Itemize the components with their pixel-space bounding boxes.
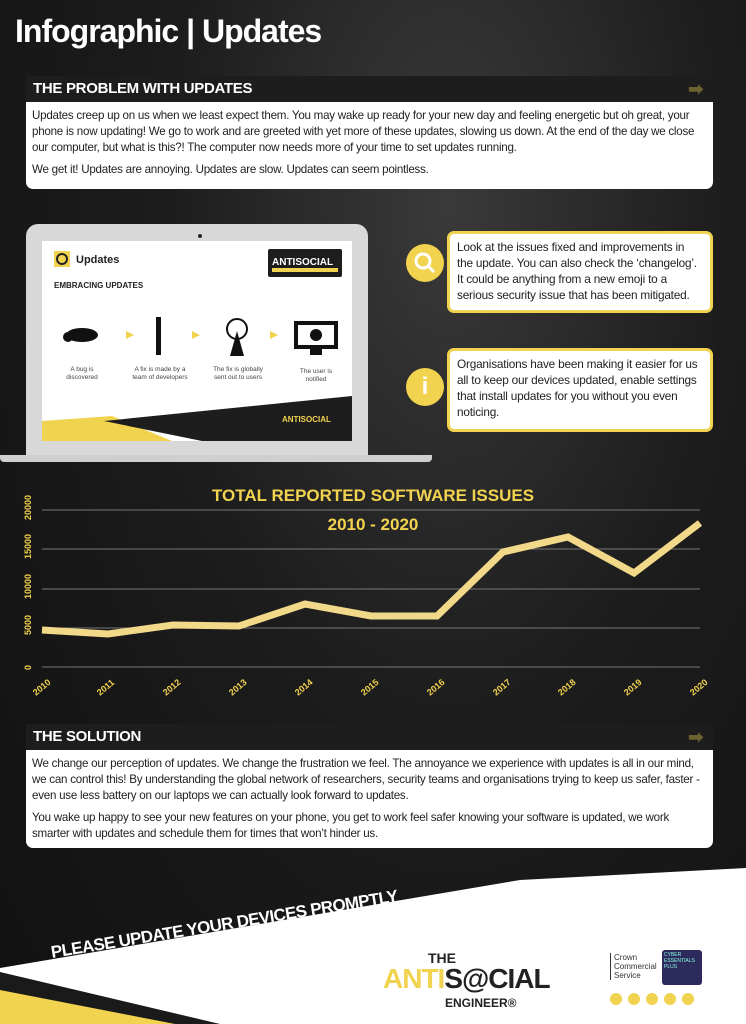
accreditation logos: Commercial — [614, 962, 657, 971]
line chart: 10000 — [23, 574, 33, 599]
heading: solution: ➡ — [688, 727, 703, 747]
line chart: 15000 — [23, 534, 33, 559]
laptop illustration: team of developers — [132, 374, 188, 381]
line chart: 5000 — [23, 615, 33, 635]
text block: problem — [26, 102, 713, 189]
accreditation logos: CYBER ESSENTIALS PLUS — [664, 952, 695, 970]
line chart: 2016 — [425, 677, 447, 698]
callout: changelog: Look at the issues fixed and improvements in the update. You can also check the ‘changelog’. It could be anything from a new emoji to a serious security issue that has been mitigated. — [457, 240, 697, 302]
heading: problem — [26, 76, 713, 102]
slogan: PLEASE UPDATE YOUR DEVICES PROMPTLY — [50, 886, 400, 962]
laptop illustration: A bug is — [70, 366, 94, 373]
callout: automatic updates: Organisations have been making it easier for us all to keep our devices updated, enable settings that install updates for you without you even noticing. — [457, 357, 697, 419]
line chart: 2011 — [95, 677, 116, 698]
chart title: TOTAL REPORTED SOFTWARE ISSUES — [212, 486, 534, 505]
panel: solution — [26, 725, 713, 848]
laptop illustration: discovered — [66, 374, 98, 381]
icon: info: i — [422, 373, 428, 400]
laptop illustration: ANTISOCIAL — [272, 257, 333, 268]
laptop illustration: sent out to users — [214, 374, 263, 381]
accreditation logos — [610, 950, 702, 1005]
line chart — [23, 486, 710, 698]
logo: antisocial engineer: ENGINEER® — [445, 996, 517, 1010]
icon: magnifier — [406, 244, 444, 282]
text block: solution: You wake up happy to see your new features on your phone, you get to work feel safer knowing your software is updated, we work smarter with updates and schedule them for times that won’t hinder us. — [32, 811, 669, 840]
logo: antisocial engineer: ANTIS@CIAL — [383, 963, 550, 994]
logo: antisocial engineer: THE — [428, 950, 456, 966]
line chart: 0 — [23, 665, 33, 670]
laptop illustration: Updates — [76, 254, 119, 266]
callout: changelog — [447, 231, 713, 313]
line chart: 2014 — [293, 677, 315, 698]
line chart: 2018 — [556, 677, 578, 698]
accreditation logos: Crown — [614, 953, 637, 962]
laptop illustration: The fix is globally — [213, 366, 264, 373]
chart title: 2010 - 2020 — [328, 515, 418, 534]
accreditation logos: Service — [614, 971, 641, 980]
icon: info — [406, 368, 444, 406]
line chart: 2010 — [31, 677, 53, 698]
panel: problem — [26, 76, 713, 189]
line chart: 2015 — [359, 677, 381, 698]
laptop illustration: ANTISOCIAL — [282, 415, 331, 424]
laptop illustration — [0, 224, 432, 462]
logo: antisocial engineer — [383, 950, 550, 1010]
laptop illustration: The user is — [300, 368, 333, 375]
text block: problem: Updates creep up on us when we least expect them. You may wake up ready for your new day and feeling energetic but oh great, your phone is now updating! We go to work and are greeted with yet more of these updates, slowing us down. At the end of the day we close our computer, but what is this?! The computer now needs more of your time to set updates running. — [32, 109, 694, 154]
heading: problem: THE PROBLEM WITH UPDATES — [33, 80, 252, 97]
line chart: 2019 — [622, 677, 644, 698]
laptop illustration: notified — [306, 376, 327, 383]
title: Infographic | Updates — [15, 13, 321, 49]
line chart: 2012 — [161, 677, 183, 698]
chart title — [212, 486, 534, 534]
line chart: 2020 — [688, 677, 710, 698]
line chart: 2013 — [227, 677, 249, 698]
heading: solution — [26, 724, 713, 750]
callout: automatic updates — [447, 348, 713, 432]
text block: solution — [26, 750, 713, 848]
laptop illustration: A fix is made by a — [135, 366, 186, 373]
line chart: 20000 — [23, 495, 33, 520]
heading: problem: ➡ — [688, 79, 703, 99]
footer banner — [0, 868, 746, 1024]
text block: problem: We get it! Updates are annoying. Updates are slow. Updates can seem pointless. — [32, 163, 429, 176]
laptop illustration: EMBRACING UPDATES — [54, 281, 144, 290]
heading: solution: THE SOLUTION — [33, 728, 141, 745]
line chart: 2017 — [491, 677, 513, 698]
text block: solution: We change our perception of updates. We change the frustration we feel. The annoyance we experience with updates is all in our mind, we can control this! By understanding the global network of researchers, security teams and organisations trying to keep us safer, faster - even use less battery on our laptops we can actually look forward to updates. — [32, 757, 700, 802]
